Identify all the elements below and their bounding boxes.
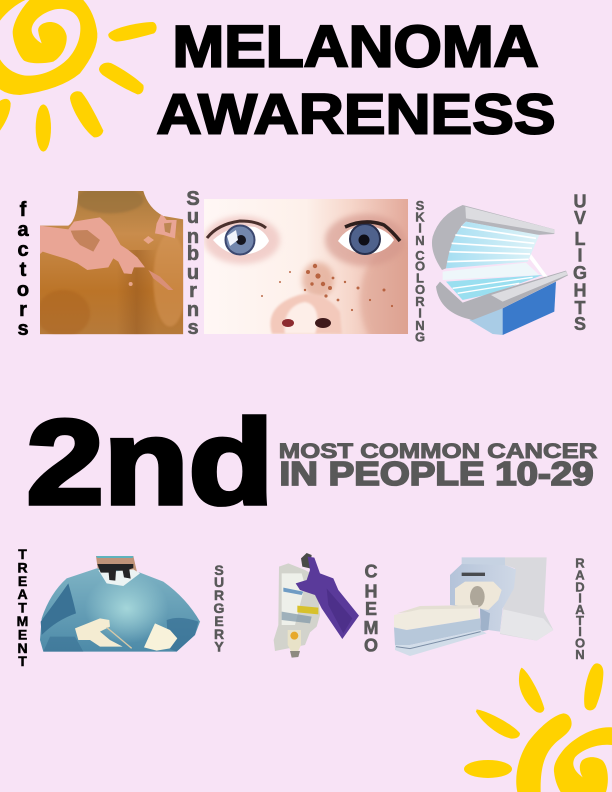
label: UV Lights	[573, 191, 587, 334]
label: factors: c	[17, 239, 29, 261]
label: Sunburns: n	[187, 226, 199, 248]
left eye	[204, 216, 280, 264]
label: Surgery: U	[214, 574, 224, 590]
label: Skin Coloring: S	[416, 198, 425, 213]
label: factors: o	[17, 279, 29, 301]
label: Chemo	[364, 562, 378, 656]
label: Skin Coloring: G	[415, 330, 425, 345]
label: Radiation: O	[575, 635, 585, 650]
label: Surgery: S	[214, 562, 224, 578]
label: Treatment: T	[18, 600, 27, 616]
label: Chemo: C	[364, 562, 378, 582]
label: Radiation	[575, 555, 585, 662]
label: Skin Coloring: C	[415, 248, 425, 263]
label: factors	[17, 199, 29, 340]
label: Surgery: E	[214, 613, 224, 629]
smudged freckle area	[302, 262, 334, 298]
label: Treatment: R	[17, 559, 28, 575]
label: Surgery: G	[214, 600, 225, 616]
label: Radiation: D	[575, 580, 585, 595]
label: Radiation: T	[576, 613, 584, 628]
label: Treatment: N	[17, 640, 28, 656]
label: Radiation: A	[575, 567, 585, 582]
label: factors: a	[17, 219, 29, 241]
label: Radiation: I	[578, 624, 582, 639]
label: Sunburns	[186, 188, 200, 339]
statistic text: IN PEOPLE 10-29	[280, 455, 594, 492]
label: Sunburns: r	[189, 280, 197, 302]
label: Sunburns: u	[187, 206, 199, 228]
statistic text	[279, 439, 598, 492]
big number: 2nd: 2nd	[26, 396, 274, 530]
label: Chemo: H	[364, 581, 378, 601]
label: factors: f	[20, 199, 27, 221]
label: Sunburns: n	[187, 299, 199, 321]
label: Skin Coloring: I	[418, 221, 422, 236]
label: Treatment: E	[18, 573, 27, 589]
label: Radiation: N	[575, 647, 585, 662]
label: Chemo: O	[364, 636, 378, 656]
label: UV Lights: H	[574, 281, 586, 301]
label: Radiation: A	[575, 602, 585, 617]
label: Treatment: M	[17, 613, 28, 629]
label: UV Lights: U	[574, 191, 586, 211]
label: factors: t	[20, 259, 27, 281]
label: Chemo: M	[364, 618, 378, 638]
label: Skin Coloring: N	[415, 233, 425, 248]
nose	[270, 294, 342, 334]
image: chemo bag and glove	[274, 553, 359, 658]
label: Skin Coloring	[415, 198, 425, 345]
label: Treatment: T	[18, 546, 27, 562]
label: Surgery	[214, 562, 225, 655]
label: Sunburns: S	[186, 188, 200, 210]
icon: sun top left	[0, 0, 157, 152]
label: Radiation: I	[578, 591, 582, 606]
label: Sunburns: b	[187, 243, 199, 265]
title	[156, 14, 556, 145]
label: UV Lights: S	[574, 314, 586, 334]
label: Treatment	[17, 546, 28, 669]
label: Sunburns: u	[187, 262, 199, 284]
label: Surgery: Y	[214, 639, 224, 655]
label: Skin Coloring: L	[416, 271, 424, 286]
right eye	[325, 214, 405, 266]
label: Treatment: E	[18, 626, 27, 642]
image: surgeon	[40, 556, 200, 652]
label: Skin Coloring: O	[415, 259, 425, 274]
label: factors: s	[17, 318, 29, 340]
label: UV Lights: L	[574, 229, 586, 249]
label: Skin Coloring: I	[418, 305, 422, 320]
label: UV Lights: G	[573, 263, 587, 283]
label: UV Lights: T	[574, 298, 586, 318]
freckles	[261, 264, 393, 311]
title: AWARENESS	[156, 82, 556, 145]
label: Treatment: A	[17, 586, 28, 602]
label: Surgery: R	[214, 587, 224, 603]
label: Skin Coloring: N	[415, 318, 425, 333]
label: Skin Coloring: K	[415, 210, 425, 225]
image: tanning bed	[432, 205, 568, 335]
label: Radiation: R	[575, 555, 585, 570]
statistic text: MOST COMMON CANCER	[279, 439, 598, 463]
image: face with freckles	[204, 199, 408, 334]
title: MELANOMA	[172, 14, 538, 79]
label: Treatment: T	[18, 653, 27, 669]
icon: sun bottom right	[464, 663, 612, 792]
label: factors: r	[19, 299, 27, 321]
label: UV Lights: V	[574, 208, 586, 228]
label: Surgery: R	[214, 626, 224, 642]
label: Skin Coloring: O	[415, 282, 425, 297]
label: Sunburns: s	[187, 317, 199, 339]
label: UV Lights: I	[577, 246, 583, 266]
image: radiation machine	[394, 557, 553, 656]
label: Skin Coloring: R	[415, 294, 425, 309]
image: sunburned back	[37, 187, 187, 337]
label: Chemo: E	[365, 599, 377, 619]
